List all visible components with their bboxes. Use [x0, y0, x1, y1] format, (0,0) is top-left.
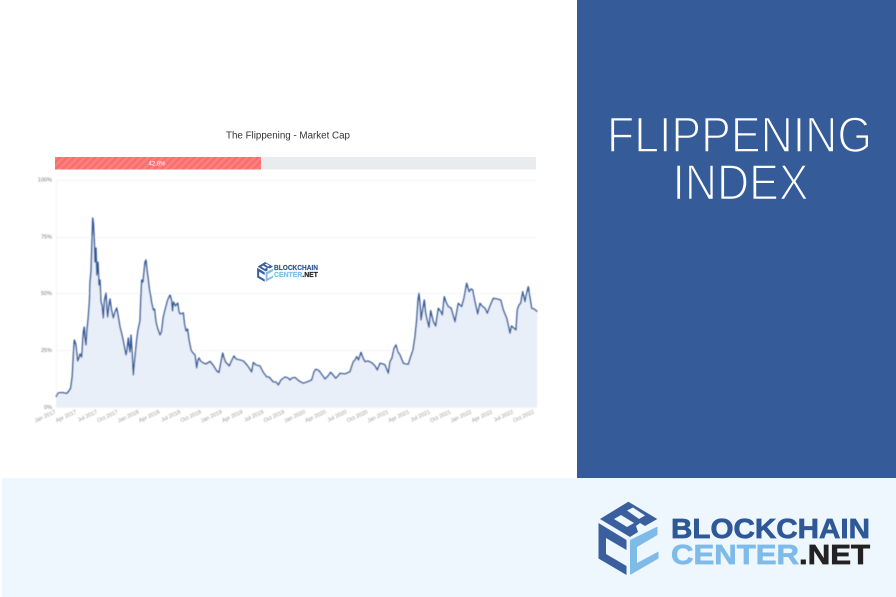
- y axis labels: 100%: [38, 178, 52, 184]
- x axis labels: Jan 2017: [34, 409, 57, 424]
- title: INDEX: [672, 154, 808, 210]
- x axis labels: Jul 2020: [327, 409, 348, 424]
- x axis labels: Apr 2018: [138, 409, 161, 424]
- x axis labels: Jan 2021: [367, 409, 390, 424]
- x axis labels: Jul 2022: [493, 409, 514, 424]
- x axis labels: Jul 2018: [160, 409, 182, 424]
- x axis labels: Jan 2020: [283, 409, 306, 424]
- wordmark: [671, 513, 870, 570]
- x axis labels: Apr 2017: [55, 409, 78, 424]
- y axis labels: [38, 178, 52, 411]
- price line: [56, 218, 537, 397]
- chart watermark logo: CENTER.NET: [274, 270, 318, 279]
- x axis labels: Oct 2020: [346, 409, 369, 424]
- x axis labels: Oct 2022: [512, 409, 535, 424]
- progress bar: 42.8%: [148, 162, 166, 168]
- x axis labels: Jul 2019: [243, 409, 265, 424]
- chart watermark logo: BLOCKCHAIN: [274, 263, 318, 272]
- x axis labels: Oct 2021: [429, 409, 452, 424]
- x axis labels: Apr 2019: [221, 409, 244, 424]
- chart heading: The Flippening - Market Cap: [226, 130, 350, 142]
- wordmark: CENTER .NET: [671, 539, 870, 570]
- progress bar: [55, 157, 536, 170]
- x axis labels: Jul 2017: [77, 409, 98, 424]
- wordmark: BLOCKCHAIN: [671, 513, 870, 544]
- x axis labels: Oct 2018: [180, 409, 202, 424]
- x axis labels: Jan 2018: [117, 409, 140, 424]
- x axis labels: Apr 2020: [304, 409, 327, 424]
- y axis labels: 75%: [41, 234, 52, 240]
- x axis labels: Jan 2022: [450, 409, 473, 424]
- x axis labels: [34, 409, 535, 424]
- y axis labels: 25%: [41, 348, 52, 354]
- icon: cube logo: [598, 502, 658, 575]
- x axis labels: Oct 2017: [96, 409, 119, 424]
- x axis labels: Jul 2021: [410, 409, 431, 424]
- footer logo: [598, 502, 870, 575]
- y axis labels: 50%: [41, 291, 52, 297]
- x axis labels: Apr 2022: [471, 409, 494, 424]
- y axis labels: 0%: [44, 405, 52, 411]
- x axis labels: Apr 2021: [388, 409, 410, 424]
- chart watermark logo: [257, 262, 318, 282]
- x axis labels: Oct 2019: [263, 409, 286, 424]
- panel: title background: [577, 0, 896, 478]
- panel: footer band: [2, 478, 896, 597]
- line chart: [34, 178, 537, 424]
- area under line: [56, 218, 537, 407]
- x axis labels: Jan 2019: [200, 409, 223, 424]
- title: [607, 107, 872, 210]
- title: FLIPPENING: [607, 107, 872, 163]
